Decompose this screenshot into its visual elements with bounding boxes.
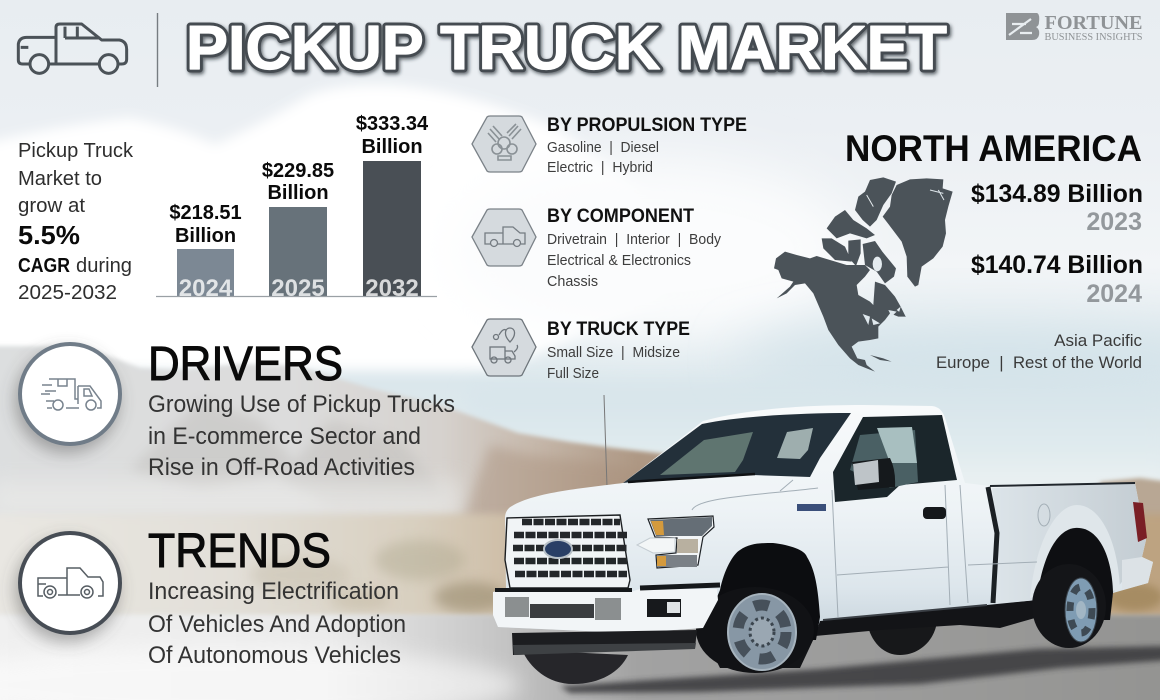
regional values: North America: NORTH AMERICA <box>845 128 1142 169</box>
regional values: North America: Europe | Rest of the World <box>936 353 1142 372</box>
bar chart: market size: Billion <box>361 136 423 158</box>
title: PICKUP TRUCK MARKET <box>186 14 947 83</box>
side window <box>833 415 957 502</box>
map: North America <box>774 177 953 372</box>
CAGR text block: during <box>76 255 132 277</box>
CAGR text block: grow at <box>18 195 85 217</box>
CAGR text block <box>18 140 134 304</box>
rear wheel arch and wheel <box>1032 528 1113 648</box>
segment: by truck type <box>472 319 690 382</box>
windshield <box>623 413 851 483</box>
tail light <box>1133 502 1147 542</box>
regional values: North America <box>845 128 1143 372</box>
segment: by propulsion type <box>472 115 747 176</box>
trends panel: Of Vehicles And Adoption <box>148 611 406 638</box>
illustration: white pickup truck <box>493 395 1153 684</box>
segment: by component: Drivetrain | Interior | Body <box>547 232 722 248</box>
headlight <box>637 516 714 568</box>
CAGR text block: 2025-2032 <box>18 282 117 304</box>
bed seam and top rail <box>990 483 1135 486</box>
rear tail section <box>1122 557 1153 590</box>
header divider <box>156 13 158 87</box>
regional values: North America: 2023 <box>1086 208 1142 236</box>
front bumper <box>493 585 720 655</box>
rocker trim <box>823 605 987 620</box>
rear fender flare <box>1030 505 1120 598</box>
grille <box>505 515 630 588</box>
regional values: North America: $140.74 Billion <box>971 251 1143 279</box>
bar chart: market size: 2032 <box>365 275 419 302</box>
CAGR text block: CAGR <box>18 255 70 277</box>
drivers panel: Rise in Off-Road Activities <box>148 454 415 481</box>
CAGR text block: Market to <box>18 168 102 190</box>
segment: by component: BY COMPONENT <box>547 206 694 227</box>
segment: by propulsion type: BY PROPULSION TYPE <box>547 115 747 136</box>
logo: Fortune Business Insights <box>1006 13 1142 43</box>
bar chart: market size: 2025 <box>271 275 325 302</box>
bar chart: market size: $333.34 <box>356 113 429 135</box>
drivers panel: in E-commerce Sector and <box>148 423 421 450</box>
icon: delivery truck <box>20 344 120 444</box>
bar chart: market size: $218.51 <box>169 202 242 224</box>
icon: pickup truck header <box>18 24 127 73</box>
drivers panel: Growing Use of Pickup Trucks <box>148 391 455 418</box>
bar chart: market size: 2024 <box>179 275 233 302</box>
pickup bed panel <box>992 483 1146 604</box>
far-side wheels and underbody <box>522 596 1060 684</box>
truck body <box>493 405 1153 633</box>
bar chart: market size: $229.85 <box>262 160 334 182</box>
title: PICKUP TRUCK MARKET <box>186 14 947 83</box>
trends panel: Of Autonomous Vehicles <box>148 642 401 669</box>
segment: by component: Chassis <box>547 274 598 290</box>
mirror <box>852 458 895 490</box>
regional values: North America: 2024 <box>1086 280 1142 308</box>
front wheel arch and wheel <box>696 543 820 673</box>
regional values: North America: $134.89 Billion <box>971 180 1143 208</box>
segment: by propulsion type: Gasoline | Diesel <box>547 140 659 156</box>
segment: by truck type: Small Size | Midsize <box>547 345 680 361</box>
segment: by truck type: BY TRUCK TYPE <box>547 319 690 340</box>
trends panel <box>20 525 406 669</box>
CAGR text block: Pickup Truck <box>18 140 134 162</box>
panel lines <box>692 480 1037 617</box>
segment: by propulsion type: Electric | Hybrid <box>547 160 653 176</box>
trends panel: TRENDS <box>148 525 331 578</box>
CAGR text block: 5.5% <box>18 220 80 250</box>
logo: Fortune Business Insights: FORTUNE <box>1044 13 1142 34</box>
drivers panel <box>20 338 455 481</box>
segment: by truck type: Full Size <box>547 366 599 382</box>
icon: pickup truck <box>20 533 120 633</box>
door handle and badge <box>923 507 946 519</box>
bar chart: market size: Billion <box>267 182 329 204</box>
trends panel: Increasing Electrification <box>148 578 399 605</box>
bar chart: market size: Billion <box>175 225 236 247</box>
drivers panel: DRIVERS <box>148 338 343 391</box>
segment: by component: Electrical & Electronics <box>547 253 691 269</box>
bar chart: market size <box>156 113 437 302</box>
regional values: North America: Asia Pacific <box>1054 331 1142 350</box>
logo: Fortune Business Insights: BUSINESS INSIGHTS <box>1044 32 1142 43</box>
fuel door <box>1038 504 1050 526</box>
segment: by component <box>472 206 722 290</box>
